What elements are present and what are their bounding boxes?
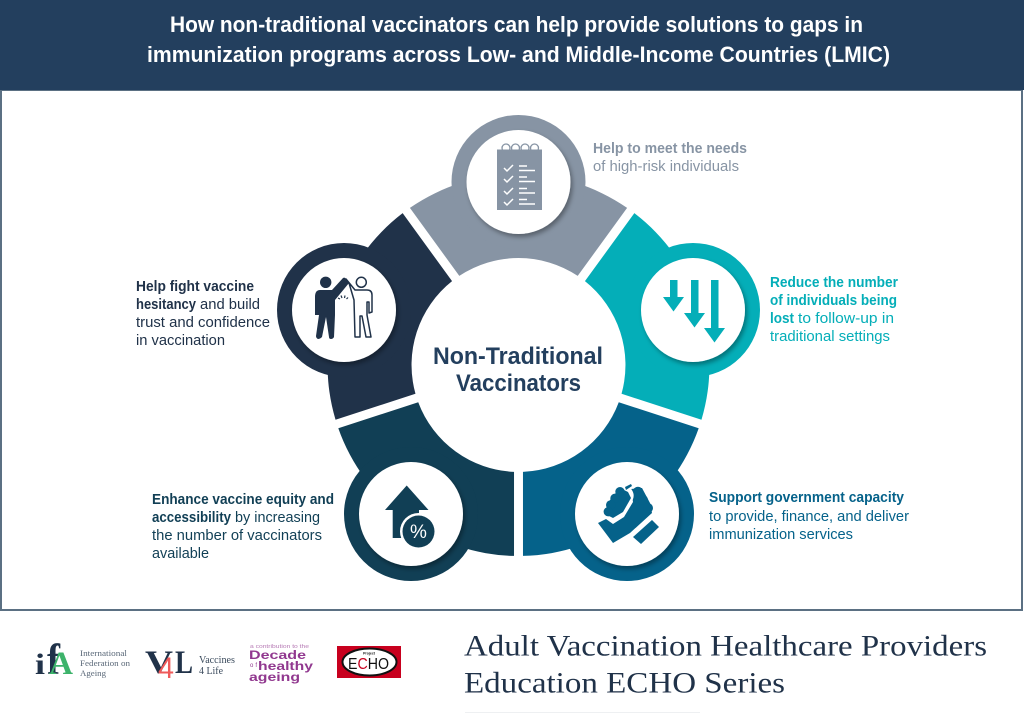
text: government capacity: immunization services [709,527,853,543]
icon: checklist clipboard [497,144,542,210]
logo: Vaccines 4 Life: L [175,645,193,681]
logo: Vaccines 4 Life: Vaccines [199,655,235,666]
logo: Project ECHO: Project [363,652,376,656]
segment: top, high-risk individuals [410,115,627,276]
text: equity and accessibility: the number of vaccinators [152,528,322,544]
text: equity and accessibility: available [152,546,209,562]
icon: up arrow with percent badge [385,486,437,550]
header banner with title: How non-traditional vaccinators can help provide solutions to gaps in [170,12,863,37]
logo: Decade of healthy ageing: Decade [249,648,306,662]
text: lost to follow-up: of individuals being [770,293,897,309]
text: equity and accessibility: Enhance vaccine equity and [152,492,334,508]
text: lost to follow-up: to follow-up in [798,311,894,327]
header banner with title [0,0,1024,90]
logo: Vaccines 4 Life: 4 Life [199,666,224,677]
logo: Decade of healthy ageing: a contribution to the [250,644,309,650]
text: high-risk individuals: of high-risk individuals [593,159,739,175]
header banner with title: immunization programs across Low- and Middle-Income Countries (LMIC) [147,42,890,67]
series title: Adult Vaccination Healthcare Providers [464,630,987,662]
segment: left, vaccine hesitancy [277,203,467,441]
logo: Project ECHO: ECHO [348,656,389,673]
text: government capacity: to provide, finance, and deliver [709,509,909,525]
text: lost to follow-up: Reduce the number [770,275,898,291]
text: government capacity: Support government capacity [709,490,904,506]
logo: Vaccines 4 Life: V [145,645,173,681]
text: high-risk individuals [593,141,747,175]
series title: Education ECHO Series [464,666,785,700]
icon: two people high five [315,277,372,339]
icon: clenched fist [598,484,659,544]
text: vaccine hesitancy: Help fight vaccine [136,279,254,295]
logo: International Federation on Ageing: Federation on [80,658,131,668]
text: lost to follow-up: traditional settings [770,329,890,345]
series title [464,630,987,700]
text: vaccine hesitancy [136,279,270,349]
logo: International Federation on Ageing: f [47,637,61,684]
logo: International Federation on Ageing [35,637,131,684]
text: vaccine hesitancy: and build [200,297,260,313]
icon: up arrow with percent badge: % [410,522,427,543]
segment: lower right, government capacity [483,373,719,583]
text: equity and accessibility: by increasing [235,510,320,526]
logo: Decade of healthy ageing: of [250,663,257,669]
text: vaccine hesitancy: trust and confidence [136,315,270,331]
framed content panel [1,90,1022,610]
text: lost to follow-up: lost [770,311,794,327]
logo: Decade of healthy ageing: healthy [258,659,313,673]
logo: International Federation on Ageing: Ageing [80,668,107,678]
logo: Project ECHO [337,646,401,678]
center circle label [414,261,622,469]
logo: Decade of healthy ageing: ageing [249,670,300,684]
logo: International Federation on Ageing: A [49,646,73,682]
center circle label: Non-Traditional [433,343,603,370]
text: government capacity [709,490,909,543]
text: equity and accessibility: accessibility [152,510,231,526]
text: lost to follow-up [770,275,898,345]
logo: International Federation on Ageing: i [35,648,45,681]
icon: three descending arrows [663,280,725,342]
logo: Decade of healthy ageing [249,644,313,684]
text: vaccine hesitancy: in vaccination [136,333,225,349]
logo: Vaccines 4 Life: 4 [158,652,174,685]
logo: International Federation on Ageing: International [80,648,128,658]
text: equity and accessibility [152,492,334,562]
text: high-risk individuals: Help to meet the needs [593,141,747,157]
segment: lower left, equity and accessibility [318,373,554,583]
text: vaccine hesitancy: hesitancy [136,297,196,313]
logo: Vaccines 4 Life [145,645,235,685]
center circle label: Vaccinators [456,370,581,397]
segment: right, lost to follow-up [570,203,760,441]
